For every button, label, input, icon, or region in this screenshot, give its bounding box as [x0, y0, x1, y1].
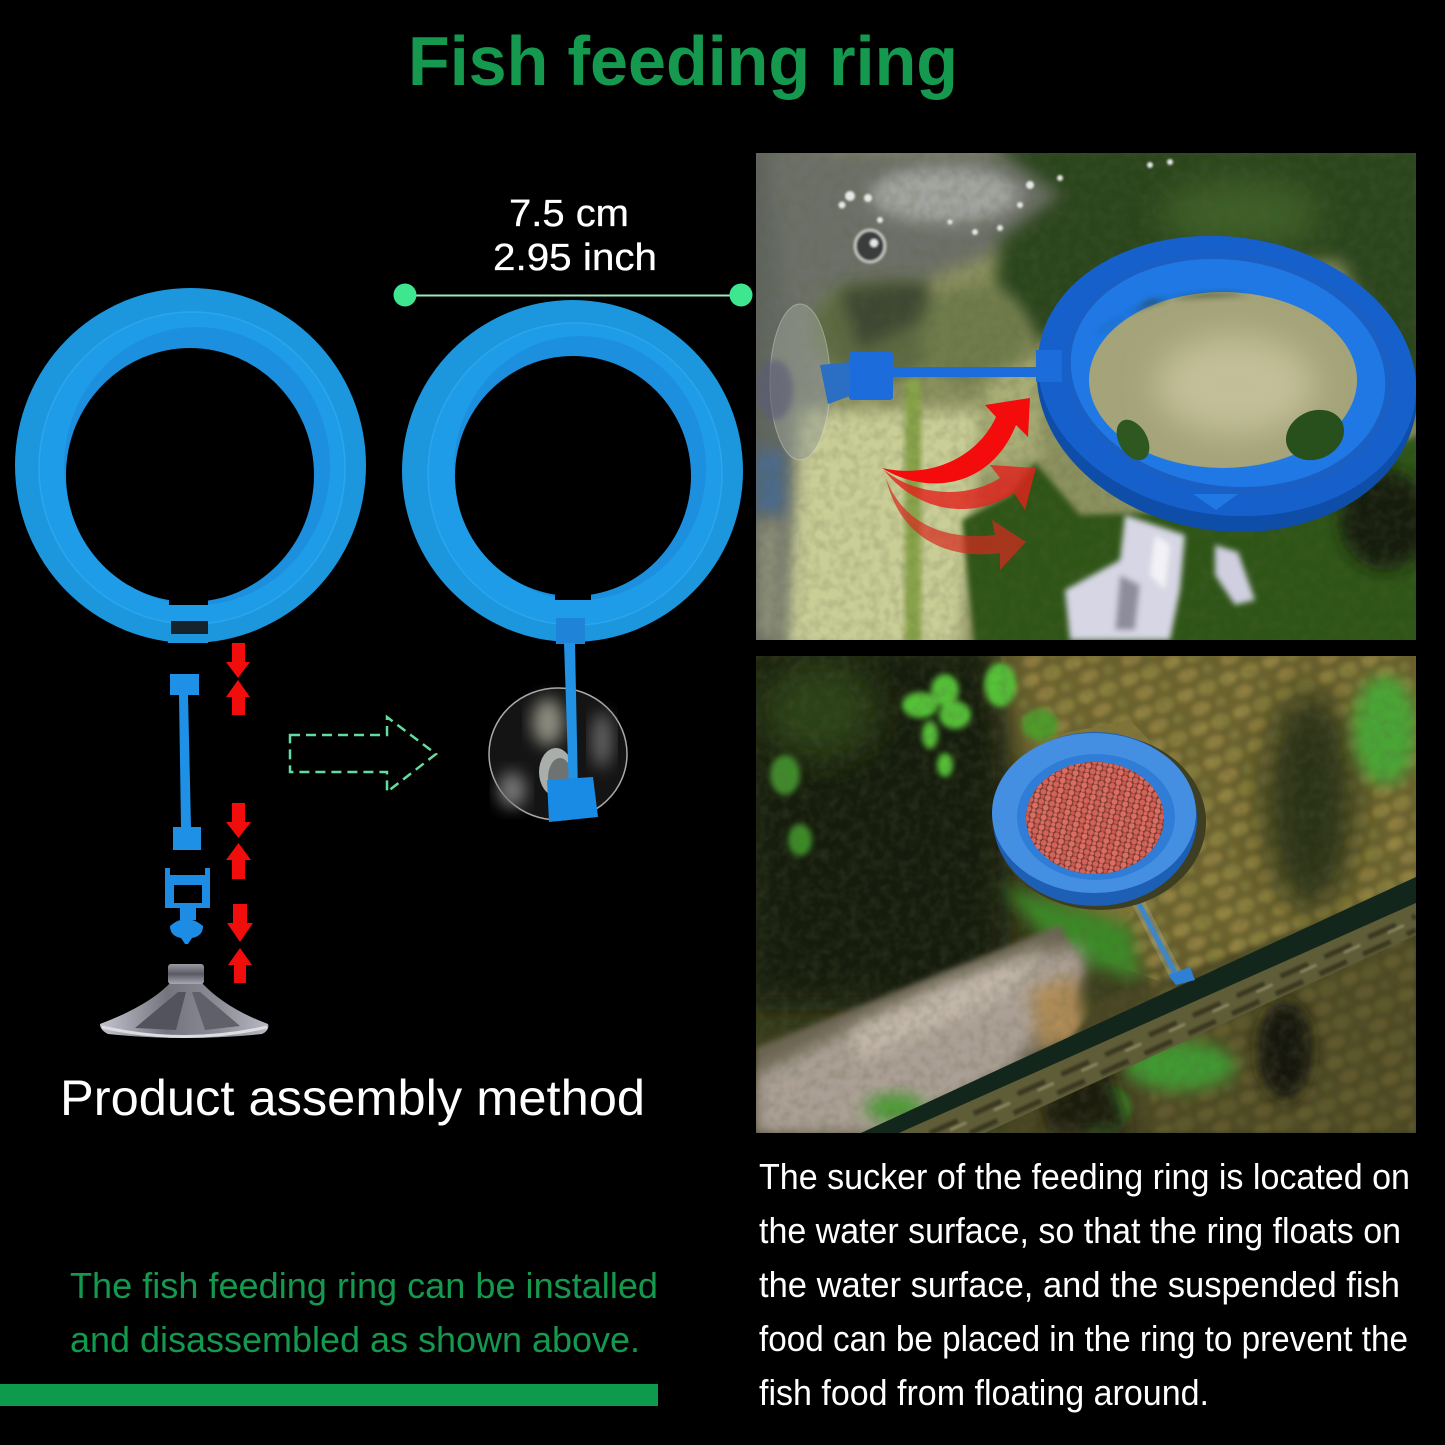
description text: food can be placed in the ring to prevent the: [759, 1318, 1408, 1359]
description text: The sucker of the feeding ring is located on: [759, 1156, 1410, 1197]
stick: [1137, 900, 1195, 985]
glass edge: [861, 877, 1416, 1133]
red assembly arrows: [226, 643, 253, 983]
stick and mount: [820, 350, 1062, 404]
suction cup: [757, 304, 830, 460]
green note: and disassembled as shown above.: [70, 1319, 640, 1360]
bubbles: [838, 159, 1173, 262]
dimension label: 2.95 inch: [493, 237, 657, 279]
arrow pair: stick and connector: [226, 803, 251, 879]
dimension label: 7.5 cm: [509, 193, 629, 235]
ring: assembled with stick and suction cup: [402, 300, 743, 822]
description text: the water surface, and the suspended fish: [759, 1264, 1400, 1305]
suction cup disc: [489, 688, 627, 820]
bright plants: [770, 663, 1058, 856]
green note: [70, 1265, 658, 1360]
description text: fish food from floating around.: [759, 1372, 1209, 1413]
floating ring with pellets: [992, 732, 1206, 910]
green bar: [0, 1384, 658, 1406]
white ornament: [1065, 515, 1255, 640]
floating ring: [1037, 236, 1416, 532]
photo: ring in aquarium with red arrows: [756, 153, 1416, 640]
stick part: [170, 674, 201, 850]
suction mount: [547, 777, 598, 822]
assembly parts: [100, 674, 268, 1038]
dimension line: [394, 284, 752, 306]
arrow pair: connector and cup: [227, 904, 253, 983]
arrow pair: ring and stick: [226, 643, 250, 715]
green note: The fish feeding ring can be installed: [70, 1265, 658, 1306]
caption: assembly method: Product assembly method: [60, 1070, 645, 1126]
water background: [740, 140, 1430, 660]
ring: disassembled: [15, 288, 366, 643]
red arrows: [882, 398, 1036, 570]
photo: ring with red pellets: [740, 640, 1430, 1133]
connector clip: [556, 618, 585, 644]
stick: [564, 643, 578, 792]
description text: [759, 1156, 1410, 1413]
aquascape background: [740, 640, 1430, 1133]
dashed arrow: [290, 717, 436, 792]
title: Fish feeding ring: [408, 22, 958, 100]
swivel connector: [165, 868, 210, 944]
description text: the water surface, so that the ring floats on: [759, 1210, 1401, 1251]
clear suction cup: [100, 964, 268, 1038]
dimension label: [493, 193, 657, 279]
